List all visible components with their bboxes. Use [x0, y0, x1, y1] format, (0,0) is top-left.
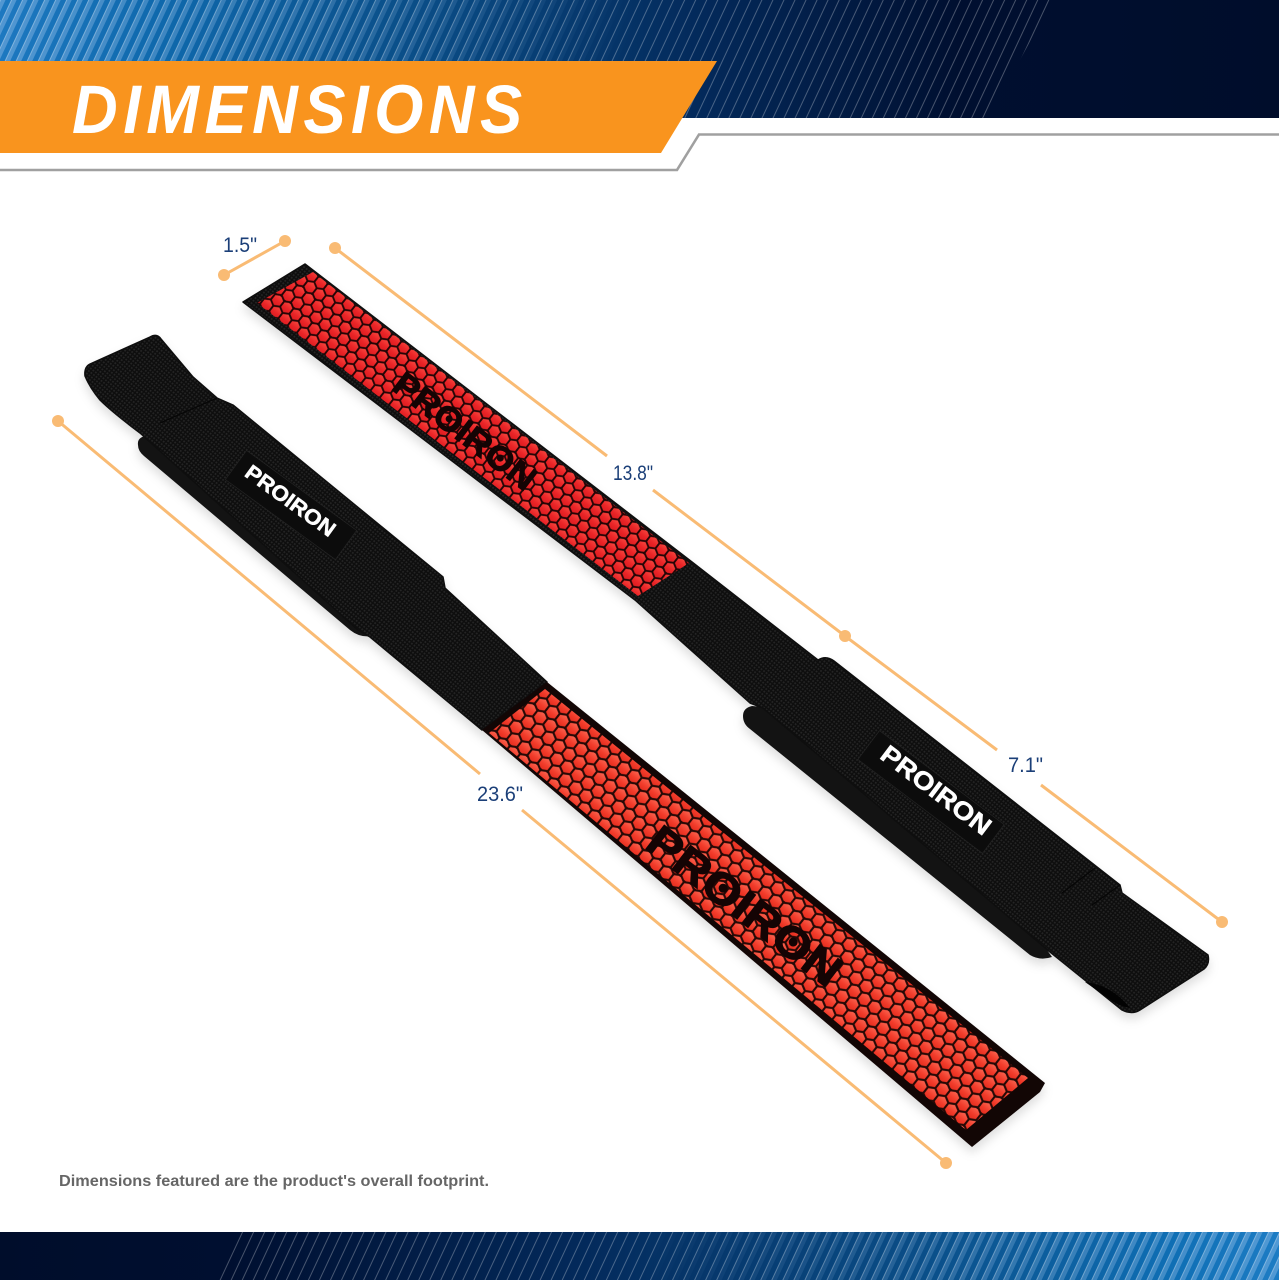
- strap: red-top strap at upper right: [243, 264, 1208, 1012]
- neoprene pad: [138, 436, 372, 636]
- dimension: 7.1 inch pad length: 7.1": [1008, 754, 1043, 777]
- fold crease: [160, 398, 217, 423]
- red grip section: [489, 689, 1028, 1130]
- fabric webbing: [85, 335, 547, 730]
- red grip section: [257, 272, 689, 596]
- neoprene pad: [743, 706, 1052, 959]
- white logo patch: [858, 731, 1004, 853]
- dimension: 1.5 inch width: 1.5": [223, 234, 257, 257]
- logo on red grip: PROIRON: [385, 365, 543, 499]
- white logo patch: [225, 450, 357, 560]
- title banner: [0, 61, 717, 153]
- red grip border: [482, 682, 1045, 1147]
- dimension: 13.8 inch grip length: [329, 242, 851, 642]
- dimension: 13.8 inch grip length: 13.8": [613, 462, 653, 485]
- strap: red-bottom strap at lower left: [85, 335, 1045, 1147]
- footnote: Dimensions featured are the product's overall footprint.: [59, 1173, 489, 1190]
- dimension: 1.5 inch width: [218, 234, 291, 281]
- dimension: 7.1 inch pad length: [845, 636, 1228, 928]
- title: DIMENSIONS: [72, 72, 528, 149]
- dimension: 23.6 inch overall length: 23.6": [477, 783, 523, 806]
- white logo patch: PROIRON: [875, 740, 997, 841]
- dimension: 23.6 inch overall length: [52, 415, 952, 1169]
- fabric webbing: [243, 264, 1208, 1012]
- pad edge crease: [1062, 868, 1120, 905]
- footer band: [0, 1232, 1279, 1280]
- white logo patch: PROIRON: [240, 461, 340, 542]
- logo on red grip: PROIRON: [637, 816, 851, 996]
- loop fold: [1085, 982, 1130, 1008]
- header band: [0, 0, 1279, 118]
